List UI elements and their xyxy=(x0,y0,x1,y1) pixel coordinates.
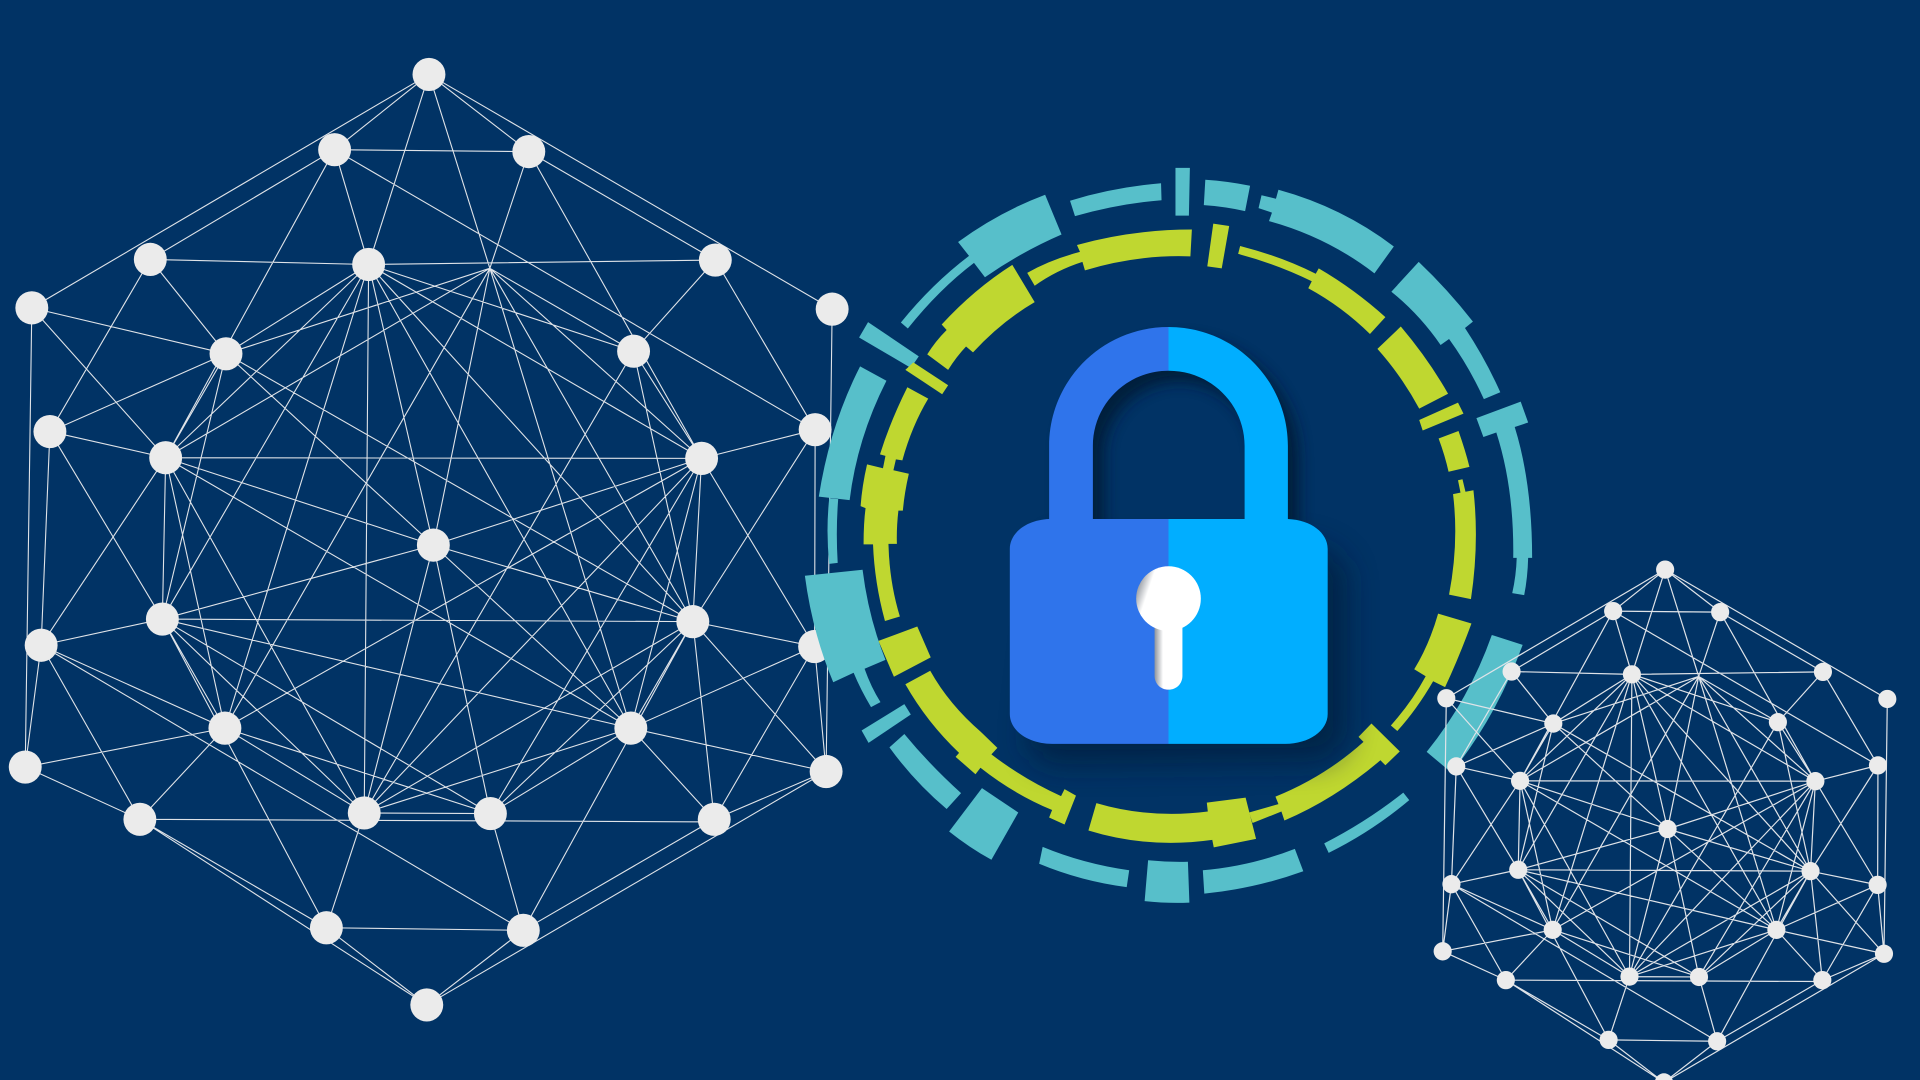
padlock shadow xyxy=(1029,338,1347,764)
small network graph xyxy=(1434,560,1896,1080)
large network graph xyxy=(9,58,849,1022)
green inner ring xyxy=(861,224,1476,847)
keyhole xyxy=(1136,566,1201,690)
central padlock emblem xyxy=(805,168,1532,903)
padlock body and shackle, left half xyxy=(1010,327,1169,744)
padlock body and shackle, right half xyxy=(1169,327,1328,744)
teal outer ring xyxy=(805,168,1532,903)
